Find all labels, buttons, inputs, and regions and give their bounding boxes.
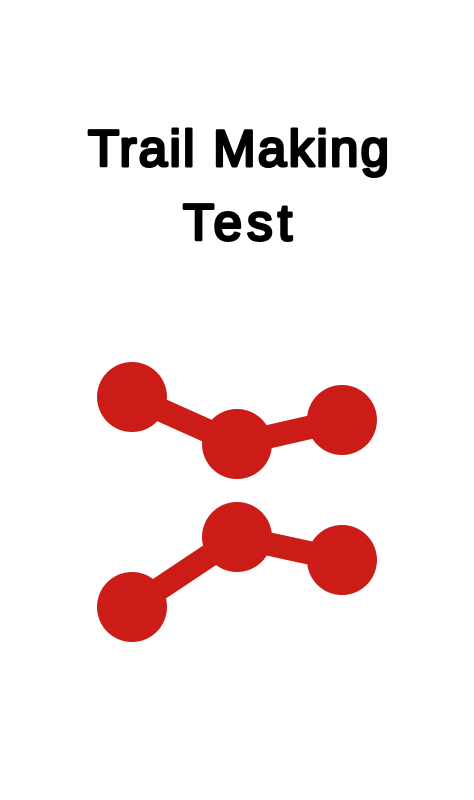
title — [88, 120, 389, 251]
title: Test — [183, 194, 292, 251]
upper trail — [97, 362, 377, 479]
title: Trail Making — [88, 120, 389, 177]
icon: trail nodes — [97, 362, 377, 642]
lower trail — [97, 502, 377, 642]
